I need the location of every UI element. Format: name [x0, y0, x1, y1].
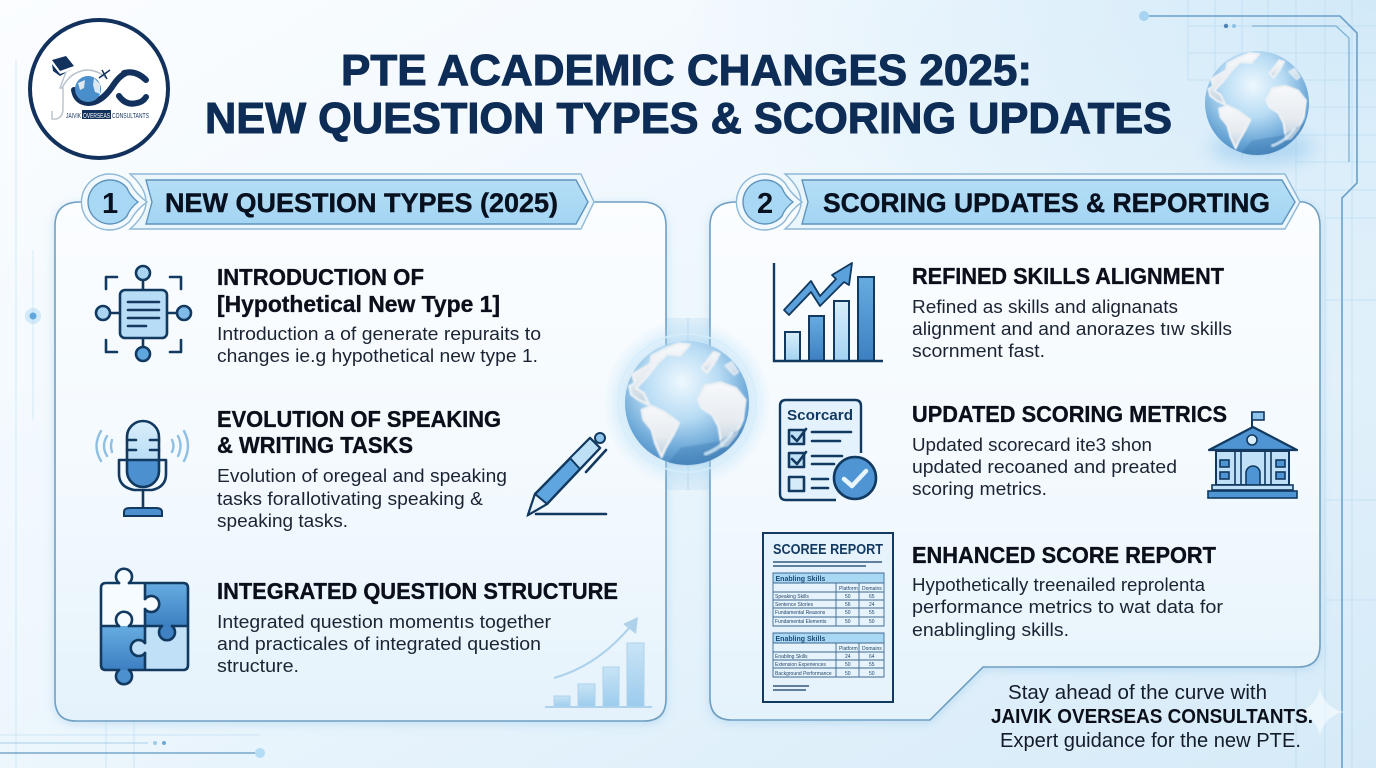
title: PTE ACADEMIC CHANGES 2025:	[341, 46, 1032, 95]
report table 2: Extension Experiences	[775, 662, 826, 668]
report table 2	[773, 633, 884, 677]
report table 1: 50	[845, 610, 851, 616]
item: introduction: Introduction a of generate repuraits to	[217, 323, 541, 344]
icon: sparkle	[1296, 688, 1344, 736]
footer callout: Expert guidance for the new PTE.	[1000, 730, 1301, 752]
decorative tech lines left and bottom	[0, 60, 265, 768]
item: integrated: and practicales of integrated question	[217, 633, 541, 654]
report table 2: 50	[845, 671, 851, 677]
icon: pen	[528, 433, 606, 515]
item: evolution: & WRITING TASKS	[217, 432, 413, 458]
icon: scorecard: Scorcard	[787, 408, 853, 424]
icon: document node	[96, 266, 191, 361]
item: evolution: EVOLUTION OF SPEAKING	[217, 406, 501, 432]
item: updated scoring: Updated scorecard ite3 shon	[912, 434, 1152, 455]
icon: faded growth chart	[545, 617, 652, 707]
item: updated scoring	[912, 401, 1227, 499]
report table 2: Enabling Skills	[775, 654, 808, 660]
section header 2: 2	[757, 188, 773, 220]
report table 2: 50	[845, 662, 851, 668]
item: refined skills: scornment fast.	[912, 340, 1045, 361]
report table 1: 50	[869, 619, 875, 625]
item: updated scoring: UPDATED SCORING METRICS	[912, 401, 1227, 427]
title	[205, 46, 1172, 143]
item: updated scoring: scoring metrics.	[912, 478, 1047, 499]
item: enhanced score report: enablingling skills.	[912, 619, 1069, 640]
logo: name	[66, 110, 149, 120]
item: evolution	[217, 406, 507, 531]
section header 1: 1	[102, 188, 118, 220]
item: introduction	[217, 264, 541, 366]
icon: microphone	[96, 421, 188, 516]
logo: C	[119, 72, 146, 104]
item: refined skills: REFINED SKILLS ALIGNMENT	[912, 263, 1225, 289]
item: integrated: structure.	[217, 655, 299, 676]
report table 1	[773, 573, 884, 626]
report table 1: 24	[869, 602, 875, 608]
logo: swoosh	[74, 73, 126, 103]
panel: scoring updates	[710, 174, 1320, 720]
report table 2: 24	[845, 654, 851, 660]
title: NEW QUESTION TYPES & SCORING UPDATES	[205, 94, 1172, 143]
logo: name: JAIVIK	[66, 111, 81, 120]
icon: scorecard	[780, 400, 876, 500]
item: refined skills: alignment and and anorazes tıw skills	[912, 318, 1232, 339]
report table 2: Background Performance	[775, 671, 832, 677]
report table 1: Enabling Skills	[776, 576, 825, 583]
report table 1: Platform	[839, 586, 858, 592]
item: evolution: tasks foraIlotivating speaking &	[217, 488, 484, 509]
item: introduction: INTRODUCTION OF	[217, 264, 424, 290]
logo: plane	[99, 70, 110, 79]
report table 1: 56	[845, 602, 851, 608]
item: enhanced score report: Hypothetically treenailed reprolenta	[912, 574, 1206, 595]
icon: top right globe	[1205, 51, 1314, 164]
icon: centre globe	[603, 319, 771, 487]
section header 2: SCORING UPDATES & REPORTING	[823, 188, 1270, 218]
item: introduction: changes ie.g hypothetical new type 1.	[217, 345, 538, 366]
logo	[30, 20, 168, 158]
item: evolution: speaking tasks.	[217, 510, 348, 531]
icon: bar chart with arrow	[774, 263, 883, 361]
report table 2: 64	[869, 654, 875, 660]
report table 2: 50	[869, 671, 875, 677]
report table 2: 55	[869, 662, 875, 668]
footer callout: JAIVIK OVERSEAS CONSULTANTS.	[991, 706, 1313, 728]
item: updated scoring: updated recoaned and preated	[912, 456, 1177, 477]
report table 1: Sentence Stories	[775, 602, 814, 608]
report table 1: 55	[869, 610, 875, 616]
item: refined skills	[912, 263, 1232, 361]
report table 1: 65	[869, 594, 875, 600]
decorative tech grid top right	[1139, 0, 1376, 768]
icon: puzzle	[101, 569, 188, 684]
report table 1: Speaking Skills	[775, 594, 809, 600]
report table 1: Fundamental Elements	[775, 619, 827, 625]
item: integrated: Integrated question momentıs together	[217, 611, 551, 632]
report table 2: Platform	[839, 646, 858, 652]
footer callout	[991, 682, 1313, 752]
report table 1: Fundamental Reasons	[775, 610, 826, 616]
report table 1: 50	[845, 619, 851, 625]
logo: globe	[75, 76, 101, 102]
footer callout: Stay ahead of the curve with	[1008, 682, 1267, 704]
logo: J outline	[52, 70, 106, 119]
section header 1: NEW QUESTION TYPES (2025)	[165, 188, 558, 218]
report table 1: 50	[845, 594, 851, 600]
section header 1	[81, 174, 594, 230]
icon: institution building	[1208, 412, 1297, 498]
item: refined skills: Refined as skills and alignanats	[912, 296, 1178, 317]
panel: new question types	[55, 174, 666, 721]
icon: score report document: SCOREE REPORT	[773, 542, 883, 558]
logo: graduation cap	[52, 56, 74, 76]
report table 2: Enabling Skills	[776, 636, 825, 643]
item: enhanced score report: performance metrics to wat data for	[912, 596, 1223, 617]
centre connector band	[665, 318, 710, 490]
icon: score report document	[763, 533, 893, 702]
item: integrated	[217, 578, 618, 676]
logo: name: OVERSEAS	[83, 111, 110, 120]
report table 1: Domains	[862, 586, 882, 592]
item: enhanced score report: ENHANCED SCORE REPORT	[912, 542, 1217, 568]
item: integrated: INTEGRATED QUESTION STRUCTURE	[217, 578, 618, 604]
item: enhanced score report	[912, 542, 1223, 640]
section header 2	[736, 174, 1300, 230]
logo: name: CONSULTANTS	[112, 111, 149, 120]
item: evolution: Evolution of oregeal and speaking	[217, 465, 507, 486]
item: introduction: [Hypothetical New Type 1]	[217, 291, 500, 317]
report table 2: Domains	[862, 646, 882, 652]
